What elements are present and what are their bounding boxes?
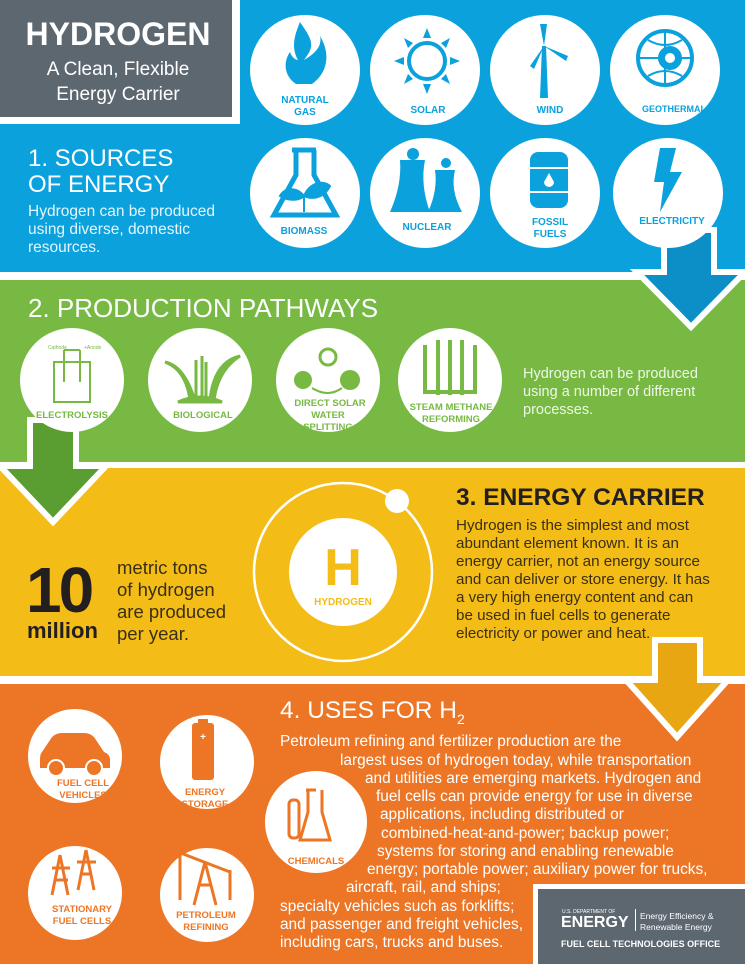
text: uses description: applications, including distributed or [380, 806, 624, 823]
icon: direct solar water splitting [276, 328, 380, 433]
icon: electricity [613, 138, 723, 248]
text: energy carrier description: a very high energy content and can [456, 589, 693, 606]
stat: 10 million: are produced [117, 601, 226, 622]
text: pathways description: processes. [523, 402, 593, 418]
title box [0, 0, 240, 124]
title box: A Clean, Flexible [47, 59, 189, 80]
panel: production pathways (green band) [0, 280, 745, 462]
icon: chemicals [265, 771, 367, 873]
text: pathways description: using a number of different [523, 384, 695, 400]
icon: biomass [250, 138, 360, 248]
text: uses description: largest uses of hydrogen today, while transportation [340, 752, 691, 769]
icon: nuclear [370, 138, 480, 248]
icon: electrolysis [20, 328, 124, 432]
logo: DOE fuel cell technologies office: U.S. DEPARTMENT OF [562, 909, 615, 915]
stat: 10 million: of hydrogen [117, 579, 215, 600]
icon: steam methane reforming [398, 328, 502, 432]
text: sources description: using diverse, domestic [28, 221, 190, 238]
icon: solar: SOLAR [410, 105, 446, 116]
icon: fuel cell vehicles: FUEL CELL [57, 778, 109, 789]
text: pathways description: Hydrogen can be produced [523, 366, 698, 382]
icon: natural gas [250, 15, 360, 125]
stat: 10 million: million [27, 618, 98, 643]
icon: nuclear: NUCLEAR [403, 222, 452, 233]
text: uses description: aircraft, rail, and ships; [346, 879, 501, 896]
stat: 10 million: metric tons [117, 557, 207, 578]
heading: 4. uses for H2: 2 [457, 711, 465, 727]
text: uses description: specialty vehicles such as forklifts; [280, 898, 514, 915]
icon: energy storage: + [200, 732, 206, 743]
icon: stationary fuel cells [28, 846, 122, 940]
stat: 10 million: 10 [26, 554, 92, 626]
logo: DOE fuel cell technologies office: Renewable Energy [640, 922, 713, 932]
icon: fuel cell vehicles [28, 709, 122, 803]
stat: 10 million: per year. [117, 623, 189, 644]
heading: 2. production pathways: 2. PRODUCTION PATHWAYS [28, 293, 378, 323]
icon: electrolysis: +Anode [84, 345, 102, 351]
text: uses description: systems for storing and enabling renewable [377, 843, 674, 860]
icon: hydrogen atom: H [324, 539, 362, 597]
icon: petroleum refining: PETROLEUM [176, 910, 236, 921]
icon: hydrogen atom [254, 483, 432, 661]
icon: energy storage: ENERGY [185, 787, 226, 798]
icon: natural gas: NATURAL [281, 95, 329, 106]
text: energy carrier description: and can deliver or store energy. It has [456, 571, 710, 588]
icon: chemicals: CHEMICALS [288, 856, 344, 867]
heading: 1. sources of energy: 1. SOURCES [28, 145, 173, 172]
logo: DOE fuel cell technologies office: FUEL CELL TECHNOLOGIES OFFICE [561, 939, 720, 949]
icon: fossil fuels: FUELS [534, 229, 567, 240]
text: sources description [28, 203, 215, 256]
text: uses description: including cars, trucks and buses. [280, 934, 503, 951]
heading: 1. sources of energy [28, 145, 173, 198]
icon: natural gas: GAS [294, 107, 316, 118]
icon: direct solar water splitting: WATER [311, 410, 345, 421]
icon: biomass: BIOMASS [281, 226, 328, 237]
panel: energy carrier (yellow band) [0, 468, 745, 676]
text: energy carrier description: be used in fuel cells to generate [456, 607, 670, 624]
text: sources description: Hydrogen can be produced [28, 203, 215, 220]
heading: 4. uses for H2: 4. USES FOR H [280, 697, 457, 724]
text: uses description: fuel cells can provide energy for use in diverse [376, 788, 693, 805]
icon: biological [148, 328, 252, 432]
icon: fuel cell vehicles: VEHICLES [59, 790, 107, 801]
icon: wind: WIND [537, 105, 563, 116]
icon: energy storage: STORAGE [182, 799, 228, 810]
text: uses description: and utilities are emerging markets. Hydrogen and [365, 770, 701, 787]
icon: geothermal [610, 15, 720, 125]
title box: Energy Carrier [56, 84, 180, 105]
icon: wind [490, 15, 600, 125]
arrow: yellow down [626, 640, 728, 737]
text: uses description: Petroleum refining and fertilizer production are the [280, 733, 621, 750]
logo: DOE fuel cell technologies office [533, 884, 745, 964]
text: energy carrier description: electricity or power and heat. [456, 625, 650, 642]
text: energy carrier description: Hydrogen is the simplest and most [456, 517, 690, 534]
panel: uses (orange band) [0, 684, 745, 964]
icon: energy storage [160, 715, 254, 810]
icon: petroleum refining [160, 848, 254, 942]
icon: stationary fuel cells: FUEL CELLS [53, 916, 111, 927]
stat: 10 million [26, 554, 226, 644]
icon: direct solar water splitting: SPLITTING [303, 422, 353, 433]
heading: 3. energy carrier: 3. ENERGY CARRIER [456, 484, 705, 511]
text: pathways description [523, 366, 698, 418]
text: energy carrier description [456, 517, 710, 642]
icon: steam methane reforming: REFORMING [422, 414, 480, 425]
text: uses description [280, 733, 707, 951]
icon: electrolysis: ELECTROLYSIS [36, 410, 108, 421]
arrow: green down [0, 420, 106, 522]
text: uses description: and passenger and freight vehicles, [280, 916, 523, 933]
icon: fossil fuels [490, 138, 600, 248]
icon: electricity: ELECTRICITY [639, 216, 705, 227]
icon: fossil fuels: FOSSIL [532, 217, 568, 228]
icon: hydrogen atom: HYDROGEN [314, 597, 372, 608]
icon: electrolysis: Cathode [48, 345, 67, 351]
text: sources description: resources. [28, 239, 100, 256]
text: energy carrier description: energy carrier, not an energy source [456, 553, 700, 570]
arrow: blue down [637, 230, 745, 327]
logo: DOE fuel cell technologies office: Energy Efficiency & [640, 911, 714, 921]
icon: biological: BIOLOGICAL [173, 410, 233, 421]
icon: geothermal: GEOTHERMAL [642, 104, 706, 114]
icon: steam methane reforming: STEAM METHANE [410, 402, 492, 413]
heading: 1. sources of energy: OF ENERGY [28, 171, 169, 198]
icon: stationary fuel cells: STATIONARY [52, 904, 113, 915]
icon: direct solar water splitting: DIRECT SOLAR [294, 398, 366, 409]
text: uses description: combined-heat-and-power; backup power; [381, 825, 669, 842]
text: uses description: energy; portable power; auxiliary power for trucks, [367, 861, 707, 878]
panel: sources of energy (blue band) [0, 0, 745, 272]
title box: HYDROGEN [26, 16, 210, 52]
icon: solar [370, 15, 480, 125]
text: energy carrier description: abundant element known. It is an [456, 535, 679, 552]
logo: DOE fuel cell technologies office: ENERGY [561, 914, 629, 931]
icon: petroleum refining: REFINING [183, 922, 229, 933]
